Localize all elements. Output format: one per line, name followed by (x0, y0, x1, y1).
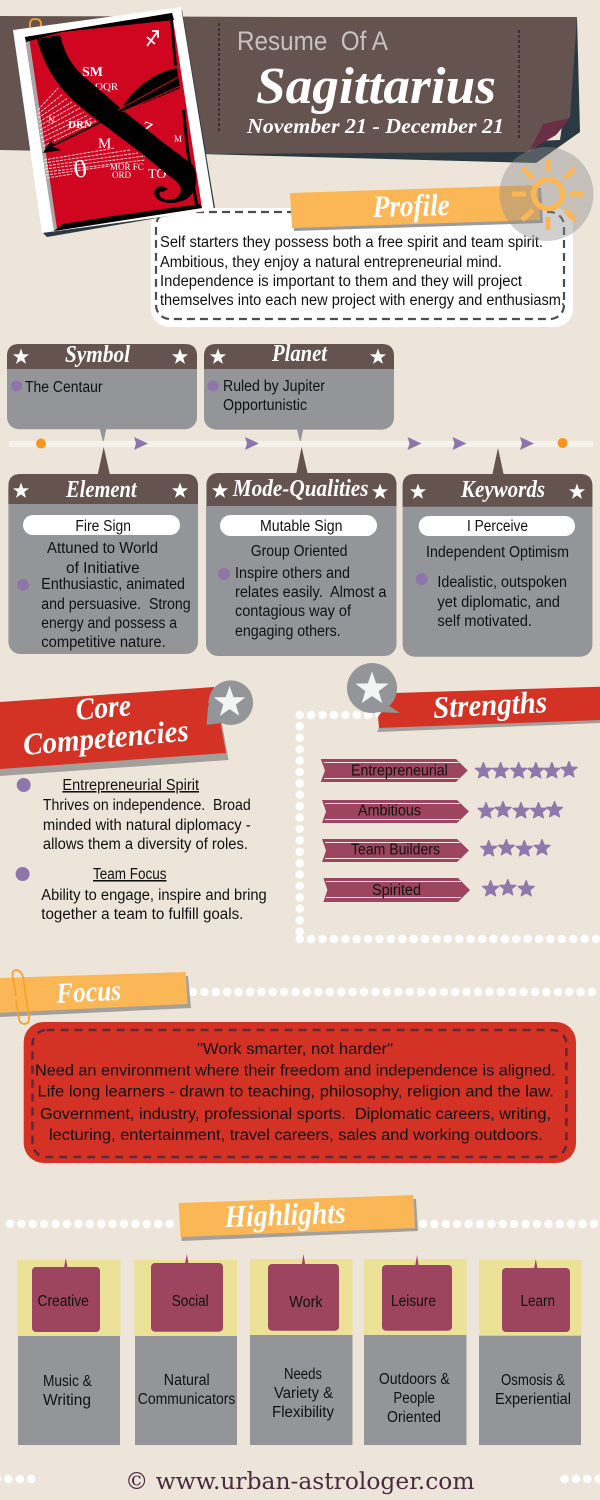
focus text: Government, industry, professional sports. Diplomatic careers, writing, (40, 1106, 551, 1123)
core competencies heading: Core (74, 687, 133, 727)
white letter fan (38, 88, 145, 178)
icon: sun (500, 147, 594, 241)
panel: element (8, 447, 198, 654)
panel: element: and persuasive. Strong (41, 596, 191, 613)
symbol heading: Symbol (65, 342, 130, 368)
focus heading: Focus (54, 975, 122, 1010)
strength: entrepreneurial (321, 759, 577, 782)
core competencies heading: Competencies (22, 713, 190, 762)
panel: element: Fire Sign (75, 518, 131, 535)
panel: mode-qualities: engaging others. (235, 623, 341, 640)
photo: sagittarius card (13, 7, 215, 237)
card: social: Social (172, 1293, 209, 1310)
panel: element: Attuned to World (47, 540, 158, 557)
banner: highlights (179, 1195, 418, 1241)
card: social: Communicators (138, 1391, 236, 1408)
photo: sagittarius card: OQR (95, 81, 119, 93)
element heading: Element (65, 477, 138, 503)
panel: keywords: I Perceive (467, 518, 528, 535)
core competency list (16, 777, 267, 923)
sweeping black S-curve (37, 35, 196, 203)
card: social (134, 1254, 237, 1445)
strength: ambitious (322, 800, 563, 823)
focus text: Need an environment where their freedom and independence is aligned. (35, 1063, 556, 1080)
icon: star bubble core (207, 680, 253, 725)
card: creative: Creative (38, 1293, 89, 1310)
card: creative: Music & (43, 1373, 92, 1390)
panel: keywords: yet diplomatic, and (437, 594, 560, 611)
focus text: Life long learners - drawn to teaching, philosophy, religion and the law. (38, 1084, 554, 1101)
profile panel (151, 208, 573, 327)
panel: element: competitive nature. (41, 634, 166, 651)
core competencies heading (22, 687, 190, 762)
card: creative: Writing (43, 1392, 91, 1409)
strength: spirited (323, 878, 534, 902)
icon: sagittarius glyph (147, 31, 158, 46)
photo: sagittarius card: N (48, 115, 55, 125)
panel: symbol: The Centaur (25, 379, 102, 396)
panel: element: energy and possess a (41, 615, 177, 632)
core competency list: Entrepreneurial Spirit (62, 777, 200, 794)
highlights heading: Highlights (223, 1195, 346, 1234)
panel: symbol (7, 342, 197, 443)
profile text: Self starters they possess both a free spirit and team spirit. (160, 234, 543, 251)
focus dots (193, 988, 600, 996)
photo: sagittarius card: MOR FC (110, 162, 144, 172)
focus text: "Work smarter, not harder" (197, 1041, 393, 1058)
card: social: Natural (164, 1372, 210, 1389)
mode-qualities heading: Mode-Qualities (232, 476, 368, 502)
banner: core competencies (0, 687, 228, 776)
strengths frame dots (300, 715, 600, 939)
profile text: Independence is important to them and they will project (160, 273, 523, 290)
panel: planet: Ruled by Jupiter (223, 378, 325, 395)
core competency list: Team Focus (93, 866, 167, 883)
photo: sagittarius card: ORD (112, 170, 132, 180)
banner: strengths (377, 684, 600, 732)
card: leisure: Oriented (387, 1409, 441, 1426)
panel: mode-qualities: relates easily. Almost a (235, 584, 387, 601)
photo: sagittarius card: SM (82, 65, 103, 80)
header banner (0, 16, 580, 163)
photo: sagittarius card: M (98, 136, 111, 152)
footer dots (0, 1475, 600, 1483)
title: Sagittarius: Sagittarius (256, 58, 496, 115)
profile heading: Profile (371, 187, 450, 224)
photo: sagittarius card: M (174, 134, 182, 144)
photo: sagittarius card: Z (139, 117, 156, 140)
core competency list: allows them a diversity of roles. (43, 836, 248, 853)
panel: keywords (403, 448, 592, 657)
card: learn (479, 1259, 582, 1445)
photo: sagittarius card: TO (148, 167, 166, 182)
panel: element: Enthusiastic, animated (41, 576, 185, 593)
title: dates: November 21 - December 21 (246, 114, 504, 138)
profile text (160, 234, 565, 309)
panel: element: of Initiative (66, 560, 140, 577)
icon: paperclip on photo (30, 19, 41, 36)
panel: mode-qualities: Mutable Sign (260, 518, 342, 535)
panel: planet: Opportunistic (223, 397, 307, 414)
strength: ambitious: Ambitious (358, 803, 421, 820)
highlights dots (10, 1220, 600, 1228)
strength: team builders: Team Builders (351, 842, 440, 859)
strengths heading: Strengths (432, 684, 548, 725)
arrow shaft (43, 68, 180, 153)
card: work (250, 1254, 352, 1445)
focus text (35, 1041, 556, 1144)
card: leisure: Leisure (391, 1293, 436, 1310)
profile banner (290, 185, 543, 231)
core competency list: together a team to fulfill goals. (41, 906, 243, 923)
profile text: themselves into each new project with energy and enthusiasm. (160, 292, 565, 309)
panel: keywords: Independent Optimism (426, 544, 569, 561)
planet heading: Planet (271, 341, 328, 367)
card: work: Flexibility (272, 1404, 334, 1421)
profile text: Ambitious, they enjoy a natural entrepreneurial mind. (160, 254, 502, 271)
strength: spirited: Spirited (372, 882, 421, 899)
panel: focus (24, 1022, 576, 1163)
panel: mode-qualities (206, 447, 396, 656)
card: learn: Osmosis & (501, 1372, 566, 1389)
card: leisure: People (393, 1390, 435, 1407)
photo: sagittarius card: 0 (72, 153, 89, 184)
panel: keywords: self motivated. (437, 613, 532, 630)
core competency list: Thrives on independence. Broad (43, 797, 251, 814)
panel: mode-qualities: Group Oriented (251, 543, 348, 560)
panel: planet (204, 341, 394, 443)
banner: focus (0, 972, 191, 1017)
panel: mode-qualities: Inspire others and (235, 565, 350, 582)
footer url: © www.urban-astrologer.com (125, 1469, 475, 1495)
panel: keywords: Idealistic, outspoken (437, 574, 567, 591)
card: learn: Learn (520, 1293, 555, 1310)
icon: paperclip (12, 970, 29, 1024)
photo: sagittarius card: DRN (68, 119, 92, 131)
keywords heading: Keywords (460, 477, 545, 503)
panel: mode-qualities: contagious way of (235, 603, 352, 620)
icon: star bubble strengths (347, 663, 400, 713)
focus text: lecturing, entertainment, travel careers, sales and working outdoors. (49, 1127, 543, 1144)
card: leisure (364, 1255, 466, 1445)
card: work: Work (289, 1294, 323, 1311)
card: leisure: Outdoors & (379, 1371, 450, 1388)
strength: team builders (322, 839, 550, 862)
timeline (9, 437, 593, 450)
card: work: Variety & (274, 1385, 334, 1402)
core competency list: Ability to engage, inspire and bring (41, 887, 267, 904)
card: learn: Experiential (495, 1391, 571, 1408)
core competency list: minded with natural diplomacy - (43, 817, 251, 834)
title: resume of a: Resume Of A (237, 26, 388, 56)
card: work: Needs (284, 1366, 322, 1383)
card: creative (17, 1258, 120, 1445)
strength: entrepreneurial: Entrepreneurial (351, 763, 448, 780)
